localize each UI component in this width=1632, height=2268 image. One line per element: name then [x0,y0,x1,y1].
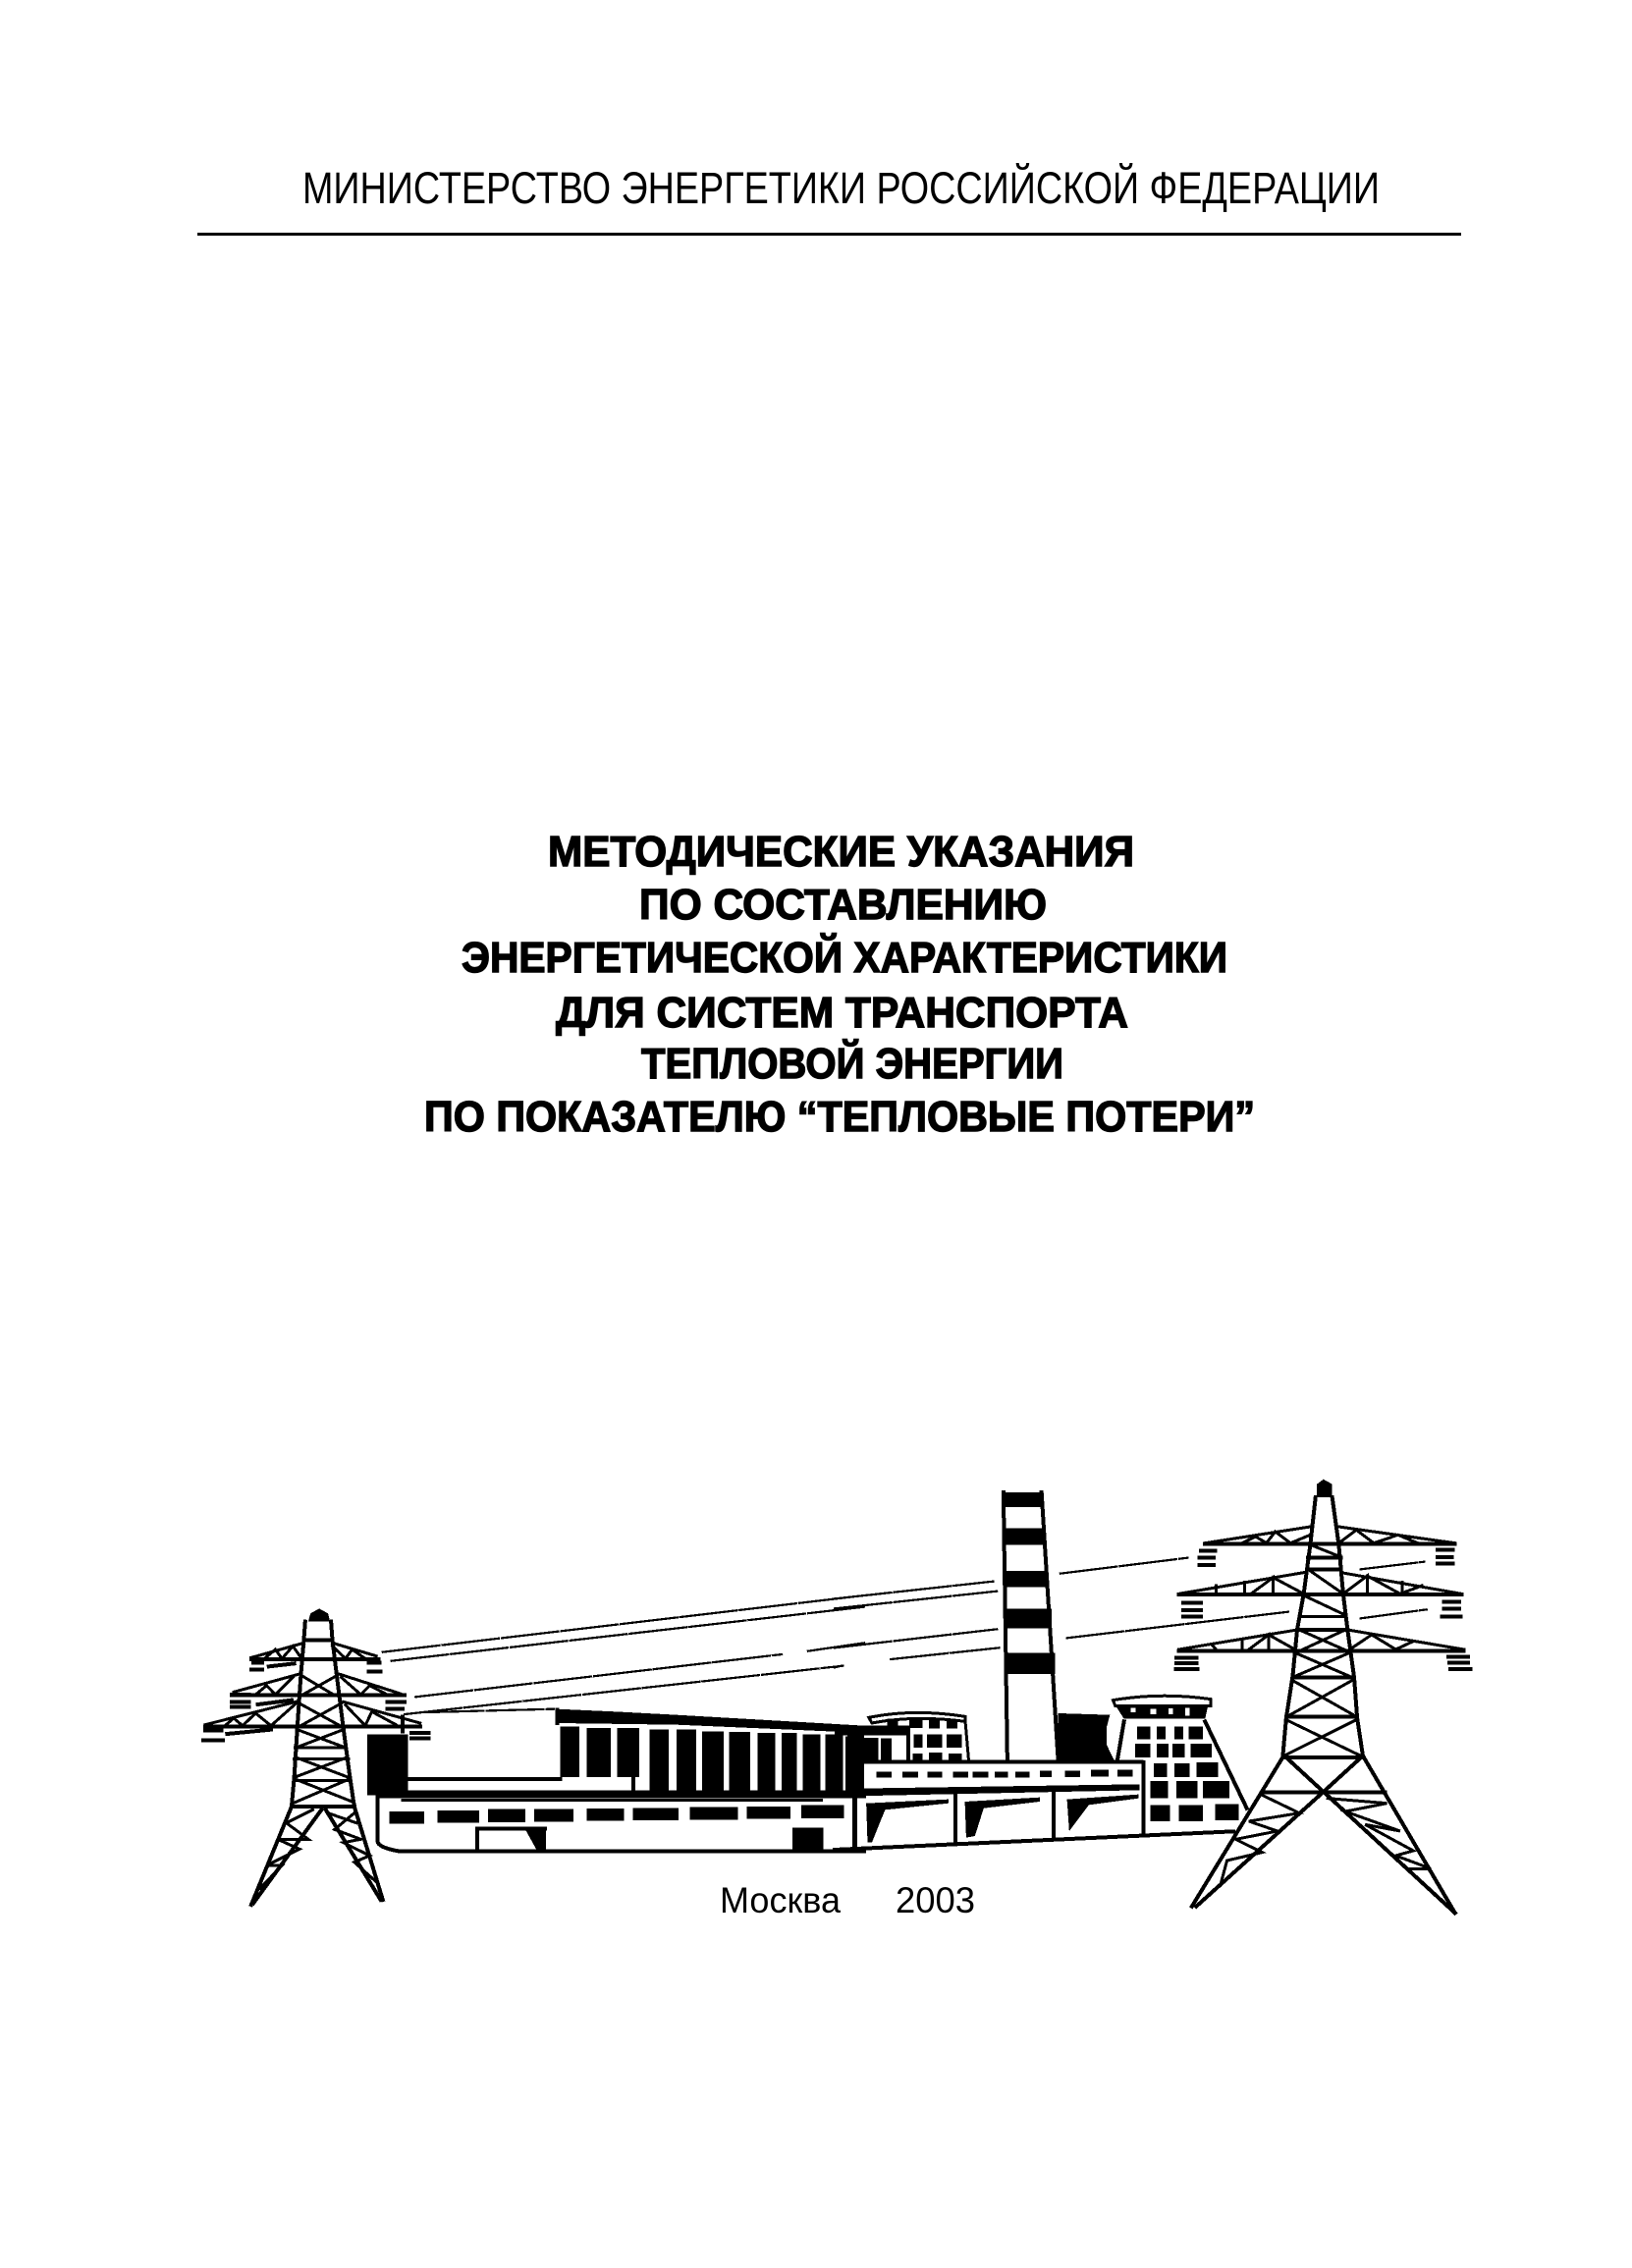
power plant illustration [203,1480,1470,1913]
city label: Москва [720,1880,841,1920]
ministry heading: МИНИСТЕРСТВО ЭНЕРГЕТИКИ РОССИЙСКОЙ ФЕДЕРАЦИИ [302,163,1380,213]
right part of illustration: stacks, towers [835,1480,1470,1913]
year label: 2003 [896,1880,975,1920]
document title: МЕТОДИЧЕСКИЕ УКАЗАНИЯ [548,828,1134,876]
document title: ПО ПОКАЗАТЕЛЮ “ТЕПЛОВЫЕ ПОТЕРИ” [424,1093,1255,1141]
chimney with striped bands [1003,1492,1059,1761]
wires right [835,1558,1427,1667]
black block [367,1735,408,1796]
document title: ЭНЕРГЕТИЧЕСКОЙ ХАРАКТЕРИСТИКИ [462,932,1227,982]
icon: left transmission tower [203,1608,429,1905]
left part of illustration: tower, wires, main hall [203,1595,864,1905]
icon: right transmission tower [1175,1480,1470,1913]
document title: ТЕПЛОВОЙ ЭНЕРГИИ [641,1038,1063,1088]
cooling tower [1113,1696,1247,1821]
document title [424,828,1255,1141]
lower hall right [835,1762,1233,1850]
hall end [835,1725,910,1790]
main hall roof and columns [407,1709,864,1792]
lower hall with window band [377,1796,864,1851]
document title: ДЛЯ СИСТЕМ ТРАНСПОРТА [556,989,1128,1037]
small cooling tower [869,1712,969,1761]
document title: ПО СОСТАВЛЕНИЮ [639,881,1047,929]
black block behind stack [1059,1713,1115,1760]
wires [383,1595,864,1714]
